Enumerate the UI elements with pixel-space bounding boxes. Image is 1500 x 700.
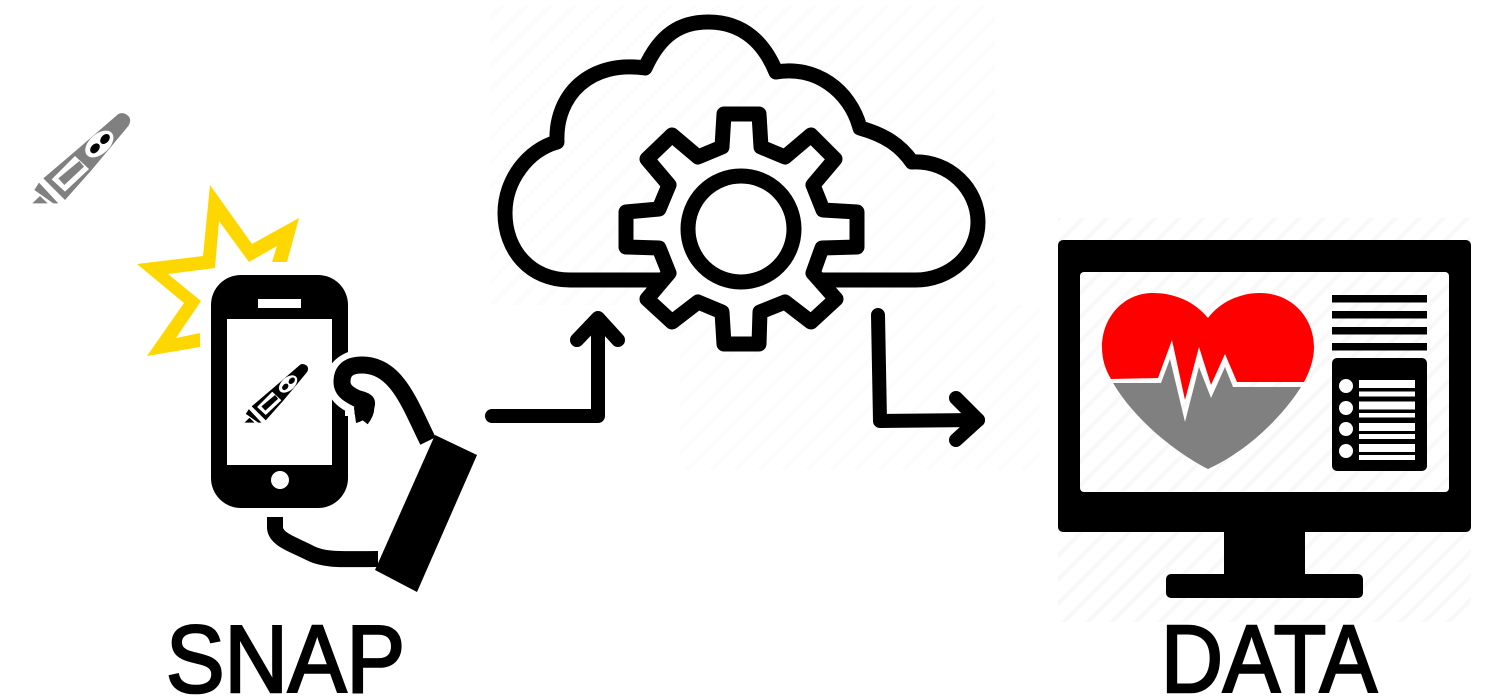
icon: grey test pen [32,113,130,203]
monitor base [1166,574,1363,598]
icon: yellow flash burst [137,185,299,356]
list panel [1332,358,1427,471]
thumb cut-out [341,365,385,416]
icon: test pen on screen [245,364,308,423]
phone screen [227,319,332,465]
monitor frame [1058,240,1471,532]
heart top red [1102,293,1314,400]
monitor stand [1224,530,1305,576]
heart bottom grey [1113,359,1301,469]
icon: cloud with gear [505,22,978,344]
cloud outline [505,22,978,280]
arrow: phone to cloud [492,318,618,416]
fingers [275,517,378,559]
thumb [342,365,428,441]
phone body [211,275,348,508]
thumb tip [354,390,375,423]
icon: phone held in hand [211,275,477,592]
wrist cuff [375,435,477,592]
gear outline [626,114,857,344]
icon: monitor with health dashboard [1058,240,1471,598]
text lines [1332,295,1427,350]
arrow: cloud to monitor [878,315,978,440]
phone speaker [258,299,301,308]
monitor screen [1080,272,1449,492]
gear hub [688,176,794,282]
phone home button [271,471,289,489]
